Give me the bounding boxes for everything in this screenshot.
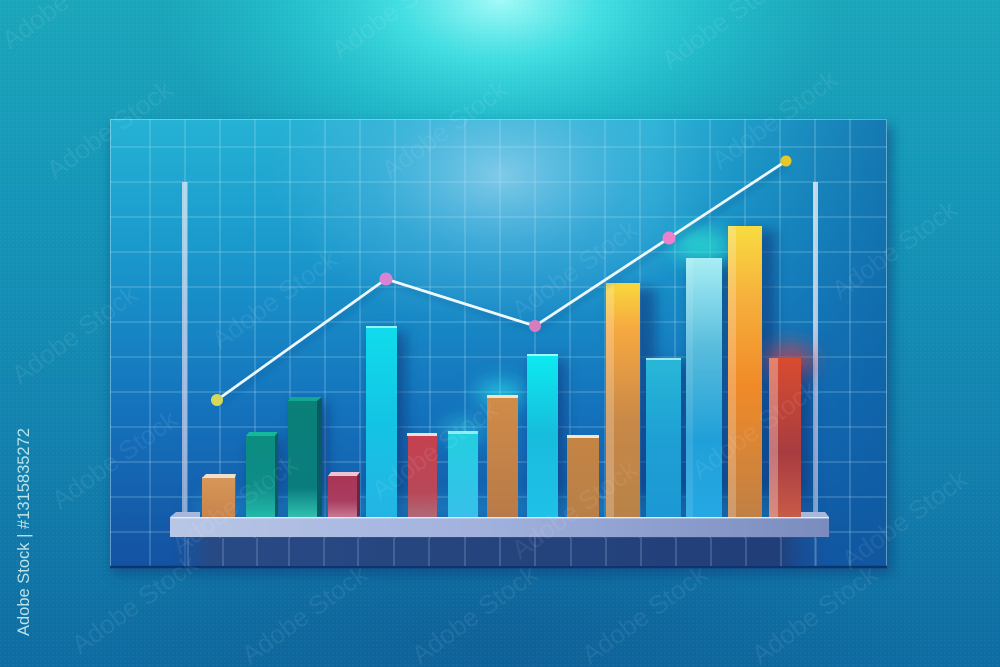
watermarks: Adobe Stock: [576, 558, 714, 667]
bar 14 amber: [728, 226, 762, 517]
point 2: [380, 272, 392, 286]
watermarks: Adobe Stock: [66, 548, 204, 660]
bar 12 blue: [646, 358, 681, 517]
watermarks: Adobe Stock: [366, 393, 504, 505]
watermarks: Adobe Stock: [706, 63, 844, 175]
watermarks: Adobe Stock: [686, 373, 824, 485]
watermarks: Adobe Stock: [376, 73, 514, 185]
right axis: [813, 182, 818, 514]
bar 10 brown: [567, 435, 599, 517]
panel: grid board: [110, 119, 892, 574]
watermarks: Adobe Stock: [826, 193, 964, 305]
shelf: [170, 512, 830, 566]
bar 6 red: [407, 433, 437, 517]
bar chart: [202, 226, 801, 517]
watermarks: Adobe Stock: [166, 448, 304, 560]
line chart: [211, 156, 792, 406]
bar 9 cyan: [527, 354, 558, 517]
bar 11 gold: [606, 283, 640, 517]
watermarks: Adobe Stock: [46, 403, 184, 515]
bar 1 orange: [202, 474, 236, 517]
point 3: [529, 320, 541, 332]
bar 15 crimson: [769, 358, 801, 517]
watermarks: Adobe Stock: [506, 213, 644, 325]
bar 8 brown: [487, 395, 518, 517]
bar 13 ice: [686, 258, 722, 517]
bar 3 teal: [288, 397, 322, 517]
point 4: [662, 232, 676, 244]
glows: [195, 230, 814, 516]
watermarks: Adobe Stock: [406, 558, 544, 667]
watermarks: Adobe Stock: [236, 558, 374, 667]
watermarks: Adobe Stock: [6, 278, 144, 390]
stock id label: Adobe Stock | #1315835272: [15, 428, 33, 636]
point 5: [780, 156, 792, 166]
watermarks: Adobe Stock: [206, 243, 344, 355]
bar shadows: [250, 230, 812, 516]
bar 2 teal: [246, 432, 278, 517]
watermarks: Adobe Stock: [746, 558, 884, 667]
bar 4 rose: [328, 472, 360, 517]
left axis: [182, 182, 188, 516]
bar 7 cyan: [448, 431, 478, 517]
point 1: [211, 394, 223, 406]
watermarks: Adobe Stock: [836, 463, 974, 575]
bar 5 cyan: [366, 326, 397, 517]
watermarks: Adobe Stock: [506, 453, 644, 565]
watermarks: Adobe Stock: [41, 73, 179, 185]
